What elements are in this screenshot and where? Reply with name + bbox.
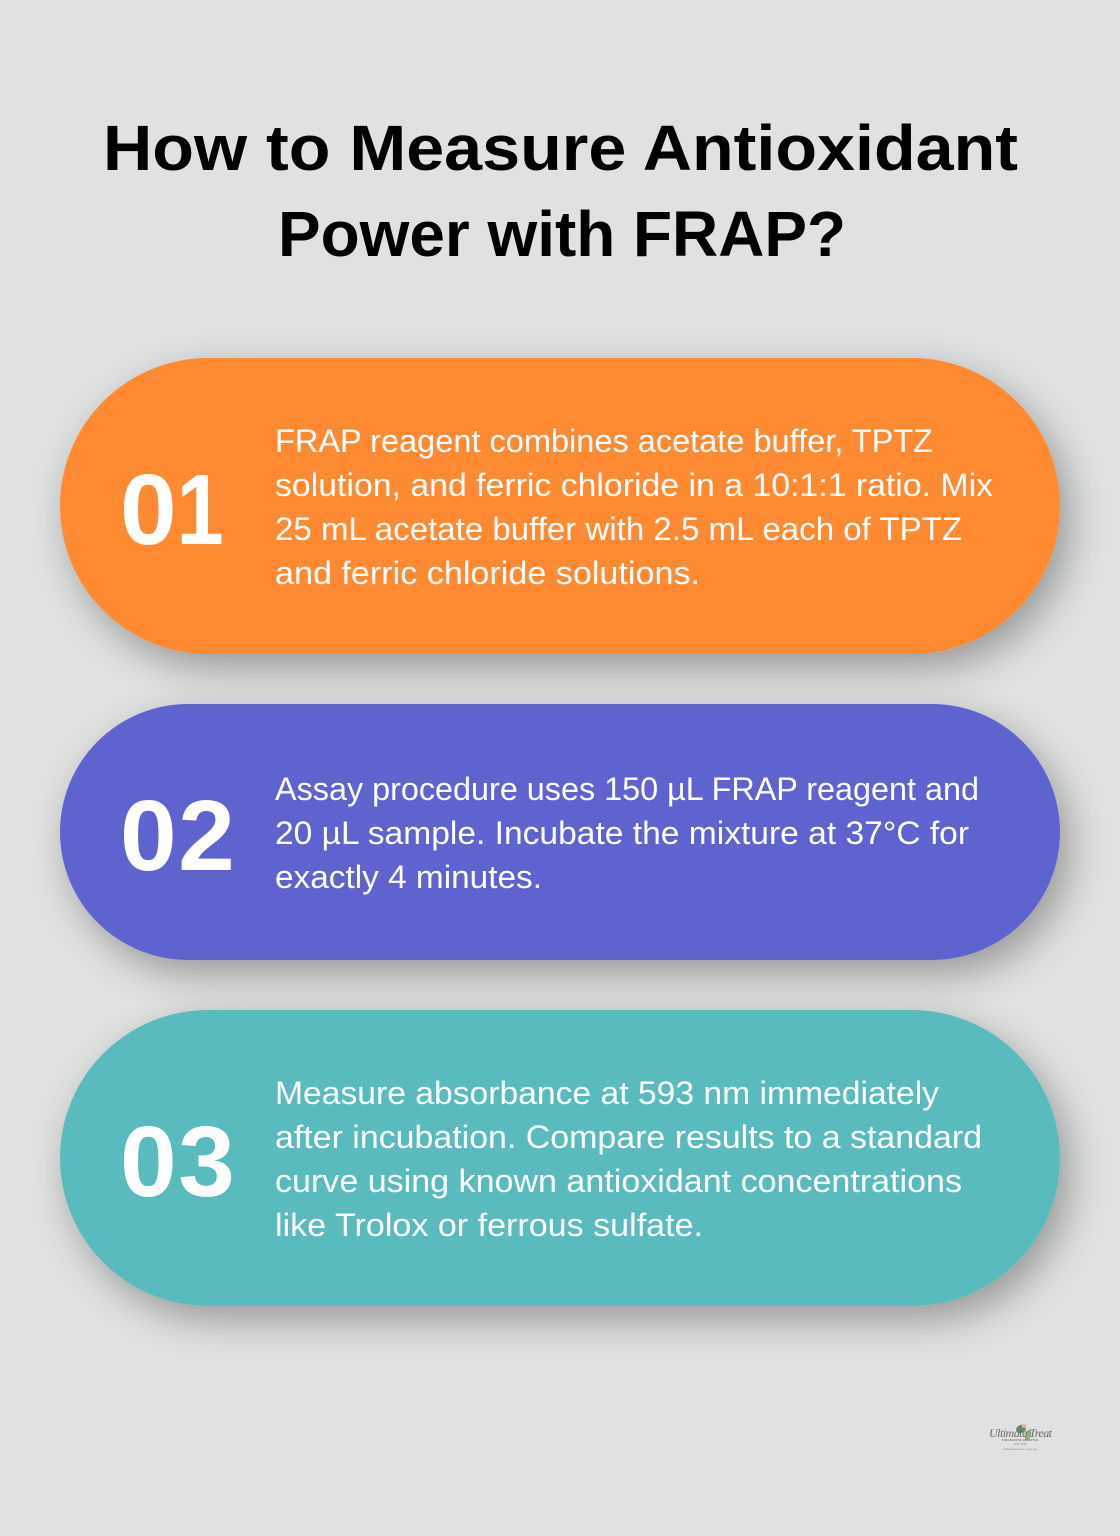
title: Power with FRAP? xyxy=(278,198,846,270)
step 01 text: solution, and ferric chloride in a 10:1:1 ratio. Mix xyxy=(275,467,993,503)
step 03 text: Measure absorbance at 593 nm immediately xyxy=(275,1075,939,1111)
panel: step 01 xyxy=(60,358,1060,654)
step 01 number xyxy=(120,453,224,566)
step 03 text: after incubation. Compare results to a standard xyxy=(275,1119,982,1155)
logo xyxy=(989,1423,1053,1451)
step 01 number: 0 xyxy=(120,455,177,566)
title: How to Measure Antioxidant xyxy=(103,112,1018,184)
step 01 text: FRAP reagent combines acetate buffer, TPTZ xyxy=(275,423,933,459)
step 01 text: and ferric chloride solutions. xyxy=(275,555,700,591)
step 02 number: 02 xyxy=(120,781,235,892)
step 02 pill xyxy=(60,704,1060,960)
step 03 text xyxy=(275,1075,982,1243)
step 03 text: curve using known antioxidant concentrations xyxy=(275,1163,962,1199)
step 02 text: exactly 4 minutes. xyxy=(275,859,542,895)
logo established: EST 2024 xyxy=(1014,1443,1028,1446)
step 02 text xyxy=(275,771,979,895)
icon: leaves xyxy=(1015,1423,1033,1441)
logo tagline: THE HOLISTIC LIFESTYLE xyxy=(1002,1438,1038,1442)
step 02 text: 20 µL sample. Incubate the mixture at 37°C for xyxy=(275,815,969,851)
logo url: ultimatetreat.com.au xyxy=(1003,1447,1037,1451)
step 03 text: like Trolox or ferrous sulfate. xyxy=(275,1207,703,1243)
step 03 number: 03 xyxy=(120,1107,235,1218)
step 01 number: 1 xyxy=(176,453,224,566)
step 01 pill xyxy=(60,358,1060,654)
step 01 text xyxy=(275,423,993,591)
step 01 text: 25 mL acetate buffer with 2.5 mL each of TPTZ xyxy=(275,511,962,547)
step 03 pill xyxy=(60,1010,1060,1306)
panel: step 03 xyxy=(60,1010,1060,1306)
step 02 text: Assay procedure uses 150 µL FRAP reagent and xyxy=(275,771,979,807)
title xyxy=(103,112,1018,270)
panel: step 02 xyxy=(60,704,1060,960)
logo wordmark: Ultimate Treat xyxy=(989,1426,1053,1440)
